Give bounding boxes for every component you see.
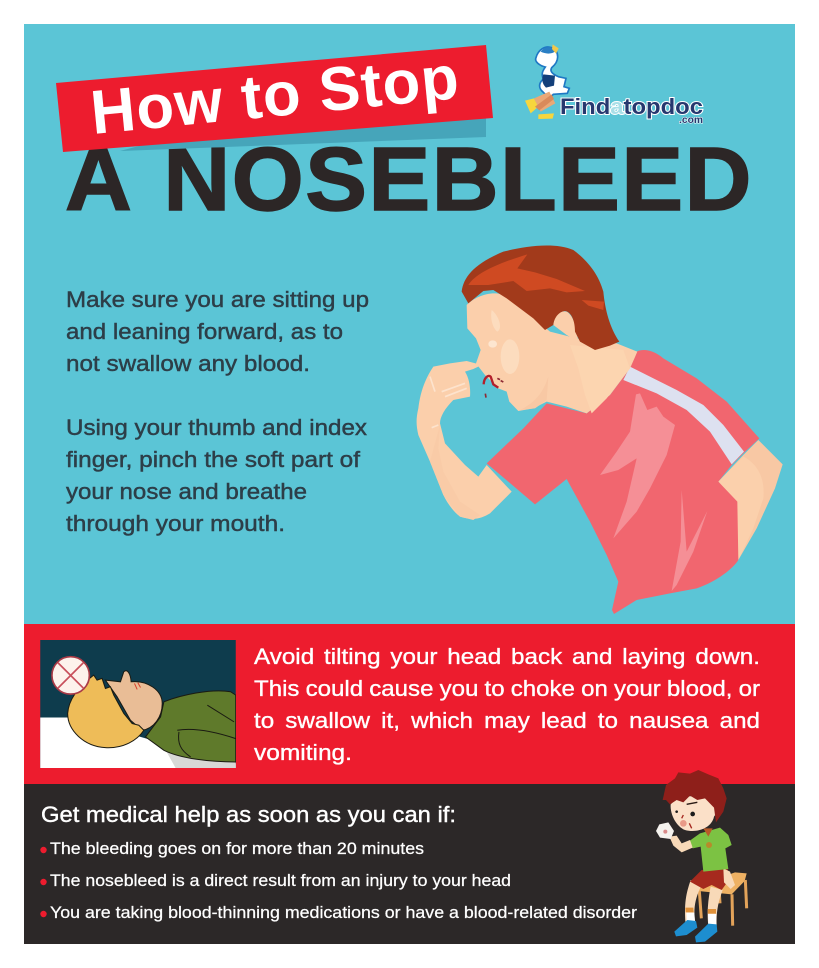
illustration: person lying down, crossed-out: [40, 640, 236, 768]
text block: pinch instructions: through your mouth.: [66, 511, 285, 536]
panel: dark medical help band: [24, 784, 795, 944]
arm on knee: [723, 868, 735, 889]
icon: duck mascot: [525, 44, 569, 119]
hair: [68, 675, 144, 748]
list item 3: You are taking blood-thinning medications or have a blood-related disorder: [50, 903, 637, 922]
panel: teal main background: [24, 24, 795, 624]
illustration: man pinching nose: [417, 246, 783, 614]
text block: sitting instructions: not swallow any blood.: [66, 351, 310, 376]
shoulder stripe: [623, 367, 744, 464]
list item 1: The bleeding goes on for more than 20 minutes: [50, 839, 424, 858]
text block: sitting instructions: Make sure you are sitting up: [66, 287, 369, 312]
face: [105, 671, 162, 730]
text block: avoid tilting warning: Avoid tilting your head back and laying down.: [254, 644, 760, 669]
hair: [462, 246, 619, 350]
logo .com: .com: [679, 115, 703, 126]
shirt: [689, 828, 732, 872]
illustration: boy on stool with tissue: [656, 770, 747, 942]
text block: sitting instructions: [66, 287, 369, 376]
text block: pinch instructions: Using your thumb and index: [66, 415, 367, 440]
shorts: [690, 868, 730, 890]
face: [671, 796, 719, 831]
text block: sitting instructions: and leaning forward, as to: [66, 319, 343, 344]
panel: red warning band: [24, 624, 795, 784]
body: [146, 691, 236, 762]
text block: pinch instructions: finger, pinch the soft part of: [66, 447, 361, 472]
text block: pinch instructions: [66, 415, 367, 536]
title banner: How to Stop: How to Stop: [88, 43, 463, 148]
arm and hand: [417, 361, 512, 519]
face and neck: [467, 293, 637, 413]
blood drips: [484, 376, 498, 388]
text block: pinch instructions: your nose and breathe: [66, 479, 307, 504]
text block: avoid tilting warning: to swallow it, which may lead to nausea and: [254, 708, 760, 733]
list item 2: The nosebleed is a direct result from an injury to your head: [50, 871, 511, 890]
logo wordmark: Findatopdoc: [560, 94, 703, 119]
legs: [685, 880, 702, 922]
stool: [697, 872, 747, 894]
tissue: [656, 822, 674, 839]
ear: [553, 311, 578, 342]
heading: get medical help: Get medical help as soon as you can if:: [41, 802, 456, 827]
shirt highlights: [600, 393, 675, 538]
icon: prohibition sign: [52, 657, 89, 694]
text block: avoid tilting warning: [254, 644, 760, 765]
raised arm: [669, 836, 693, 852]
text block: avoid tilting warning: vomiting.: [254, 740, 352, 765]
shirt: [487, 350, 759, 614]
hair: [663, 770, 727, 822]
text block: avoid tilting warning: This could cause you to choke on your blood, or: [254, 676, 760, 701]
list: medical help conditions: [40, 839, 637, 922]
shoes: [674, 920, 697, 936]
far arm: [718, 440, 783, 560]
title: A NOSEBLEED: A NOSEBLEED: [65, 130, 753, 230]
logo: Findatopdoc: [525, 44, 703, 126]
